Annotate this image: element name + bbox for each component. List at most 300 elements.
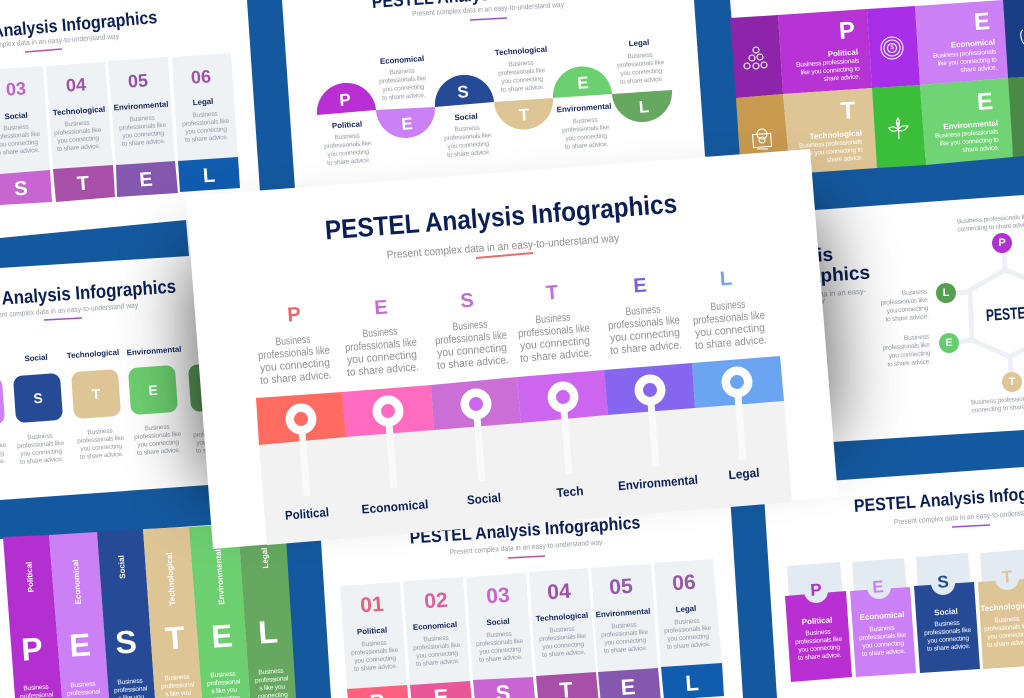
- columns: [3, 521, 296, 698]
- icon: network: [744, 47, 767, 69]
- column body text: professionals like: [601, 629, 649, 639]
- hexagon captions: to share advice.: [885, 313, 929, 323]
- square body text: you connecting: [196, 437, 239, 447]
- icon: social outline: [1021, 30, 1024, 44]
- column labels: Environmental: [113, 100, 169, 112]
- column body text: you connecting: [542, 641, 585, 651]
- column labels: Environmental: [595, 607, 651, 619]
- vertical labels: Political: [24, 561, 36, 593]
- factor body text: professionals like: [324, 140, 372, 150]
- column letters: L: [257, 613, 279, 651]
- column numbers: 06: [672, 571, 696, 595]
- square letters: T: [91, 386, 101, 402]
- semicircle letters: E: [401, 114, 413, 134]
- column body text: s like you: [259, 684, 286, 692]
- node letters: P: [998, 237, 1006, 249]
- pin heads: [290, 371, 748, 430]
- square body text: [0, 421, 242, 468]
- column descriptions: to share advice.: [610, 339, 682, 357]
- square body text: Business: [144, 424, 171, 432]
- column body text: to share advice.: [542, 649, 586, 659]
- column body text: Business: [3, 124, 30, 132]
- underline: [25, 49, 62, 52]
- factor labels: [285, 466, 760, 523]
- subtitle: Present complex data in an easy-: [755, 286, 867, 303]
- square labels: Environmental: [126, 345, 182, 357]
- underline: [44, 318, 82, 320]
- square body text: to share advice.: [137, 447, 181, 457]
- square body text: professionals like: [193, 429, 241, 439]
- column letters: [369, 670, 700, 698]
- square labels: Social: [24, 353, 48, 363]
- column letters: E: [210, 617, 234, 655]
- column labels: Technological: [53, 105, 105, 117]
- square body text: Business: [27, 433, 54, 441]
- square body text: Business: [203, 422, 230, 430]
- grid body text: share advice.: [826, 154, 864, 164]
- column letters: P: [286, 304, 302, 326]
- column body text: professionals like: [182, 118, 230, 128]
- column body text: you connecting: [57, 135, 100, 145]
- column body text: to share advice.: [57, 143, 101, 153]
- column letters: S: [114, 623, 138, 661]
- column body text: professional: [161, 681, 195, 691]
- column body text: to share advice.: [354, 663, 398, 673]
- grid letters: T: [840, 97, 857, 125]
- column letters: E: [373, 297, 389, 319]
- grid letters: E: [976, 88, 994, 116]
- center slide drop shadow: [192, 209, 833, 489]
- column labels: Political: [357, 625, 387, 637]
- column body text: to share advice.: [479, 654, 523, 664]
- square body text: you connecting: [80, 443, 123, 453]
- card body text: professionals like: [795, 636, 843, 646]
- slide: bottom-middle numbered columns: [340, 512, 724, 698]
- column labels: Legal: [192, 97, 214, 107]
- column labels: Social: [4, 111, 28, 121]
- column descriptions: to share advice.: [695, 334, 767, 352]
- square body text: you connecting: [137, 439, 180, 449]
- column body text: to share advice.: [185, 134, 229, 144]
- column descriptions: Business: [535, 312, 571, 326]
- column body text: [0, 110, 231, 157]
- column descriptions: you connecting: [610, 327, 680, 345]
- column descriptions: Business: [275, 334, 311, 348]
- factor body text: Business: [389, 68, 416, 76]
- column descriptions: to share advice.: [260, 369, 332, 387]
- column body text: Business: [674, 618, 701, 626]
- card body text: you connecting: [927, 635, 970, 645]
- column labels: Legal: [675, 604, 697, 614]
- hexagon captions: professionals like: [880, 297, 928, 307]
- factor body text: Business: [454, 125, 481, 133]
- column numbers: [360, 571, 696, 617]
- card labels: Social: [934, 607, 958, 617]
- column labels: Social: [486, 617, 510, 627]
- factor labels: Legal: [728, 466, 760, 482]
- factor labels: Social: [466, 491, 502, 507]
- semicircle letters: [339, 73, 650, 134]
- column letter bands: [347, 663, 724, 698]
- column body text: you connecting: [604, 637, 647, 647]
- pin stems: [301, 382, 743, 496]
- grid labels: Political: [827, 48, 858, 59]
- factor body text: to share advice.: [382, 92, 426, 102]
- vertical labels: Social: [117, 555, 127, 579]
- slide: top-middle semicircle wave: [317, 0, 672, 167]
- hexagon captions: Business: [902, 288, 928, 297]
- square body text: professionals like: [77, 435, 125, 445]
- factor body text: to share advice.: [327, 157, 371, 167]
- column body text: Business: [164, 674, 191, 682]
- factor body text: you connecting: [620, 68, 663, 78]
- column letters: T: [164, 619, 186, 657]
- column body text: Business: [423, 635, 450, 643]
- column numbers: 04: [65, 74, 87, 96]
- factor labels: Environmental: [556, 102, 612, 114]
- card body text: you connecting: [862, 640, 905, 650]
- factor labels: Economical: [380, 54, 424, 66]
- factor labels: Political: [285, 505, 329, 523]
- column labels: Economical: [413, 620, 457, 632]
- square body text: professionals like: [134, 431, 182, 441]
- grid body text: share advice.: [962, 144, 1000, 154]
- rounded letter squares: [0, 362, 238, 427]
- factor labels: Legal: [628, 38, 650, 48]
- column body text: Business: [486, 631, 513, 639]
- column letters: P: [20, 630, 44, 668]
- column body text: professional: [67, 688, 101, 698]
- column descriptions: you connecting: [695, 322, 765, 340]
- factor body text: to share advice.: [501, 84, 545, 94]
- column body text: [350, 617, 713, 673]
- column body text: professional: [114, 685, 148, 695]
- card letters: P: [810, 580, 822, 600]
- column descriptions: professionals like: [258, 344, 330, 362]
- slide background: [186, 149, 838, 549]
- column body text: Business: [64, 120, 91, 128]
- underline: [476, 253, 533, 258]
- column body text: to share advice.: [604, 645, 648, 655]
- grid cells: [730, 0, 1024, 176]
- colour band: [256, 356, 784, 445]
- card body text: to share advice.: [798, 652, 842, 662]
- panel: center slide: [186, 149, 838, 549]
- column cards: [340, 559, 722, 689]
- factor body text: Business: [572, 117, 599, 125]
- square body text: to share advice.: [80, 451, 124, 461]
- column letter bands: [0, 157, 240, 205]
- card labels: Political: [801, 615, 833, 627]
- column numbers: 03: [5, 78, 27, 100]
- column numbers: 02: [424, 589, 448, 613]
- square letters: S: [33, 390, 43, 406]
- column descriptions: professionals like: [608, 314, 680, 332]
- semicircle letters: S: [457, 82, 469, 102]
- grid letters: P: [838, 17, 856, 45]
- hexagon captions: [880, 213, 1024, 414]
- column labels: [357, 604, 697, 637]
- grid labels: [809, 38, 998, 141]
- column body text: Business: [192, 111, 219, 119]
- column body text: you connecting: [667, 633, 710, 643]
- square body text: professionals like: [17, 440, 65, 450]
- slide: middle-right hexagon: [676, 213, 1024, 414]
- hexagon captions: to share advice.: [887, 358, 931, 368]
- underline: [952, 525, 990, 527]
- square body text: you connecting: [20, 448, 63, 458]
- grid body text: Business professionals: [799, 138, 863, 150]
- semicircle letters: P: [339, 90, 351, 110]
- icon: plant: [889, 118, 908, 139]
- square body text: to share advice.: [20, 456, 64, 466]
- semicircle letters: T: [518, 105, 530, 125]
- column body text: you connecting: [479, 646, 522, 656]
- column body text: you connecting: [416, 650, 459, 660]
- subtitle: Present complex data in an easy-to-understand way: [386, 232, 620, 262]
- column body text: Business: [258, 668, 285, 676]
- column descriptions: you connecting: [437, 342, 507, 360]
- icon: coin: [881, 37, 903, 59]
- grid body text: like you connecting to: [937, 56, 997, 68]
- title: Infographics: [756, 263, 871, 291]
- node letters: [943, 237, 1016, 388]
- factor body text: you connecting: [382, 84, 425, 94]
- hexagon captions: you connecting: [888, 350, 931, 360]
- hexagon spokes: [946, 250, 1012, 382]
- square letters: [33, 382, 158, 406]
- column body text: you connecting: [185, 126, 228, 136]
- factor body text: to share advice.: [447, 149, 491, 159]
- column letters: [286, 268, 733, 326]
- semicircle letters: L: [638, 97, 650, 117]
- column descriptions: professionals like: [345, 336, 417, 354]
- factor labels: Political: [332, 119, 362, 131]
- title: PESTEL Analysis Infographics: [409, 512, 641, 548]
- column body text: professionals like: [413, 642, 461, 652]
- semicircle letters: E: [577, 73, 589, 93]
- column body text: you connecting: [122, 130, 165, 140]
- column letters: T: [545, 282, 559, 304]
- factor body text: [323, 51, 666, 167]
- column body text: s like you: [211, 687, 238, 695]
- underline: [470, 18, 507, 20]
- column letters: [20, 613, 279, 668]
- column descriptions: Business: [625, 304, 661, 318]
- factor body text: to share advice.: [565, 141, 609, 151]
- column letters: S: [14, 178, 28, 200]
- card body text: professionals like: [924, 627, 972, 637]
- column letters: E: [632, 275, 648, 297]
- factor body text: professionals like: [562, 124, 610, 134]
- card body text: to share advice.: [927, 643, 971, 653]
- slide: top-right colour grid: [730, 0, 1024, 176]
- grid body text: Business professionals: [796, 57, 860, 69]
- square body text: to share advice.: [196, 445, 240, 455]
- column numbers: 05: [127, 70, 149, 92]
- column body text: professionals like: [476, 638, 524, 648]
- column numbers: 04: [547, 580, 572, 604]
- card letters: S: [937, 572, 949, 592]
- factor labels: Economical: [361, 497, 429, 517]
- node letters: T: [1009, 376, 1016, 388]
- column body text: [19, 667, 290, 698]
- vertical labels: [24, 547, 270, 606]
- factor labels: Tech: [556, 484, 584, 500]
- light tabs: [787, 549, 1024, 600]
- hexagon: [970, 270, 1024, 357]
- column body text: Business: [117, 678, 144, 686]
- column body text: professionals like: [539, 633, 587, 643]
- card body text: Business: [994, 616, 1021, 624]
- card body text: professionals like: [859, 632, 907, 642]
- factor body text: professionals like: [498, 67, 546, 77]
- card body text: Business: [805, 629, 832, 637]
- semicircles: [317, 66, 672, 138]
- square body text: Business: [87, 428, 114, 436]
- column descriptions: to share advice.: [437, 354, 509, 372]
- column body text: you connecting: [354, 655, 397, 665]
- card body text: Business: [869, 625, 896, 633]
- column labels: [4, 97, 214, 121]
- factor body text: to share advice.: [620, 76, 664, 86]
- slide: bottom-right tab cards: [785, 480, 1024, 682]
- card notches: [804, 566, 1019, 603]
- card labels: [801, 601, 1024, 627]
- column numbers: 06: [190, 66, 212, 88]
- column labels: Technological: [536, 611, 588, 623]
- column letters: L: [684, 670, 700, 696]
- column descriptions: you connecting: [520, 335, 590, 353]
- title: [676, 245, 871, 291]
- column descriptions: professionals like: [518, 322, 590, 340]
- card body text: to share advice.: [862, 648, 906, 658]
- column numbers: 01: [360, 593, 385, 617]
- hexagon captions: Business: [904, 333, 930, 342]
- square labels: Technological: [67, 348, 119, 360]
- factor body text: professionals like: [617, 59, 665, 69]
- column body text: professionals like: [664, 625, 712, 635]
- factor body text: you connecting: [501, 76, 544, 86]
- hexagon nodes: [936, 233, 1022, 392]
- grid body text: [796, 48, 1000, 166]
- vertical labels: Economical: [71, 559, 83, 605]
- column body text: Business: [23, 684, 50, 692]
- subtitle: Present complex data in an easy-to-understand way: [449, 537, 603, 557]
- column descriptions: to share advice.: [347, 361, 419, 379]
- factor body text: you connecting: [447, 141, 490, 151]
- factor body text: you connecting: [565, 133, 608, 143]
- coloured cards: [785, 578, 1024, 682]
- column descriptions: professionals like: [435, 329, 507, 347]
- column letters: E: [139, 169, 153, 191]
- column body text: Business: [361, 640, 388, 648]
- factor labels: [332, 38, 650, 131]
- slide: bottom-left vertical columns: [3, 521, 296, 698]
- hexagon captions: professionals like: [882, 342, 930, 352]
- column body text: Business: [549, 626, 576, 634]
- column cards: [0, 53, 238, 174]
- factor labels: Social: [454, 112, 478, 122]
- column letters: T: [76, 173, 90, 195]
- column body text: professional: [255, 675, 289, 685]
- factor body text: professionals like: [444, 132, 492, 142]
- column descriptions: you connecting: [260, 357, 330, 375]
- column descriptions: to share advice.: [520, 347, 592, 365]
- square labels: [24, 345, 182, 363]
- grid body text: Business professionals: [933, 48, 997, 60]
- column body text: Business: [129, 115, 156, 123]
- column descriptions: [257, 297, 767, 387]
- grid letters: E: [973, 8, 991, 36]
- column letters: E: [68, 626, 92, 664]
- column body text: Business: [210, 671, 237, 679]
- column letters: L: [202, 165, 216, 187]
- factor body text: professionals like: [379, 75, 427, 85]
- column body text: to share advice.: [122, 138, 166, 148]
- grid labels: Technological: [809, 129, 862, 141]
- column descriptions: Business: [362, 326, 398, 340]
- factor body text: Business: [334, 133, 361, 141]
- column numbers: [5, 66, 212, 100]
- grid letters: [838, 8, 994, 125]
- node letters: E: [945, 337, 953, 349]
- factor body text: Business: [508, 60, 535, 68]
- column body text: professionals like: [119, 122, 167, 132]
- vertical labels: Environmental: [214, 549, 226, 605]
- card letters: T: [1001, 567, 1013, 587]
- icon: gear monitor: [753, 129, 771, 149]
- vertical labels: Legal: [260, 547, 270, 569]
- column letters: S: [459, 290, 475, 312]
- grid body text: share advice.: [823, 73, 861, 83]
- hexagon captions: you connecting: [886, 305, 929, 315]
- column numbers: 03: [486, 584, 510, 608]
- column body text: professionals like: [54, 127, 102, 137]
- grid labels: Environmental: [943, 119, 998, 131]
- column descriptions: you connecting: [347, 349, 417, 367]
- column letters: [14, 165, 216, 200]
- factor body text: Business: [627, 52, 654, 60]
- factor body text: you connecting: [327, 149, 370, 159]
- card letters: E: [872, 577, 884, 597]
- icon: coin: $: [890, 45, 894, 51]
- grid body text: Business professionals: [935, 128, 999, 140]
- card body text: [794, 615, 1024, 662]
- card body text: Business: [934, 620, 961, 628]
- grid body text: like you connecting to: [803, 146, 863, 158]
- card letters: [810, 567, 1013, 600]
- slide: middle-left rounded squares: [0, 277, 242, 468]
- slide: top-left numbered columns: [0, 7, 240, 205]
- column descriptions: Business: [710, 299, 746, 313]
- grid labels: Economical: [950, 38, 995, 50]
- underline: [508, 556, 545, 558]
- column body text: Business: [70, 681, 97, 689]
- square letters: E: [148, 382, 158, 398]
- card labels: Economical: [859, 610, 905, 622]
- subtitle: to-understand way: [763, 295, 826, 309]
- column descriptions: professionals like: [693, 309, 765, 327]
- column numbers: 05: [609, 575, 634, 599]
- grid body text: like you connecting to: [800, 65, 860, 77]
- factor labels: Environmental: [618, 473, 698, 493]
- title: PESTEL Analysis Infographics: [324, 189, 678, 245]
- vertical labels: Technological: [165, 552, 177, 606]
- grid body text: share advice.: [960, 64, 998, 74]
- grid body text: like you connecting to: [939, 136, 999, 148]
- column body text: to share advice.: [416, 658, 460, 668]
